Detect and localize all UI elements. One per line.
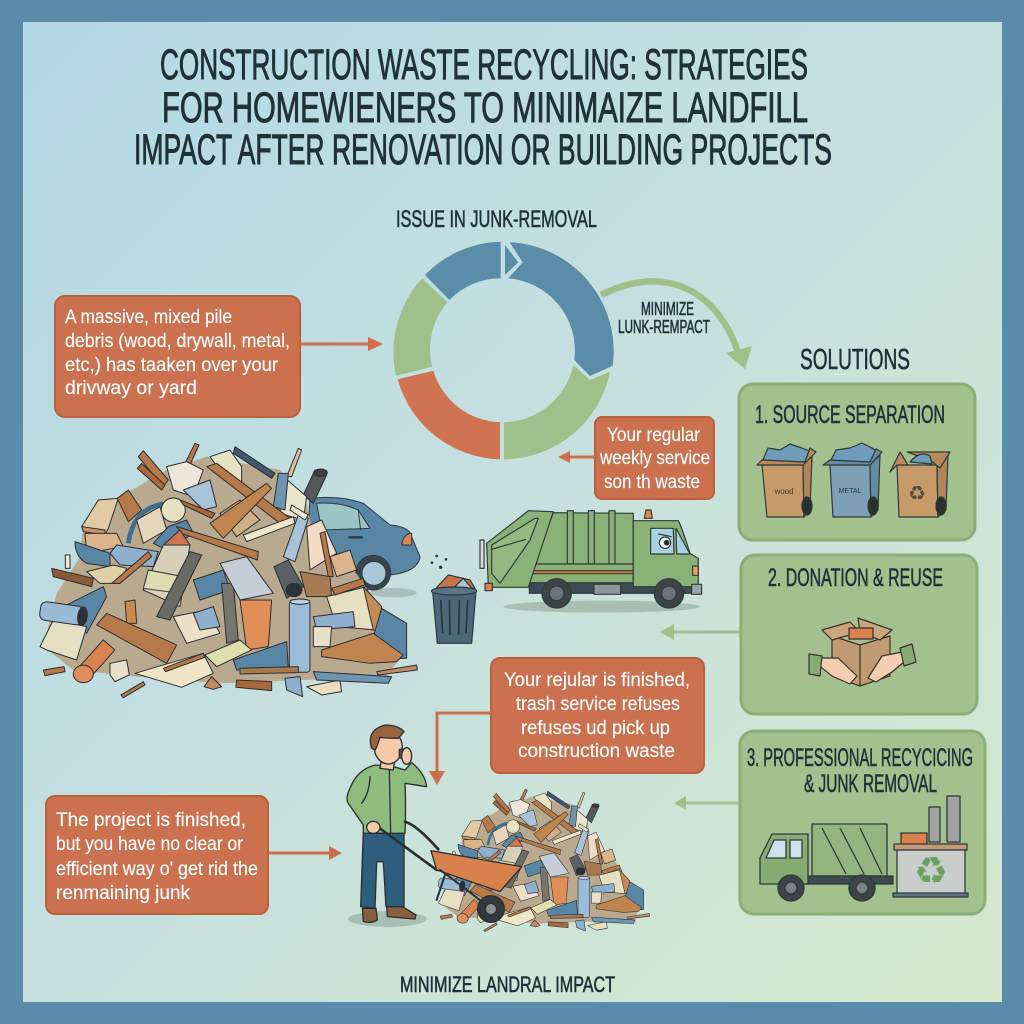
callout: weekly service: Your regular	[607, 425, 701, 446]
footer label: MINIMIZE LANDRAL IMPACT	[400, 972, 615, 997]
callout: weekly service	[595, 417, 714, 499]
callout: massive pile	[55, 296, 300, 417]
icon: recycling truck	[760, 824, 893, 901]
icon: trash can	[431, 555, 477, 643]
callout: massive pile: debris (wood, drywall, metal,	[65, 331, 290, 352]
panel: donation and reuse	[741, 555, 977, 714]
callout: massive pile: drivway or yard	[65, 378, 197, 399]
icon: recycling plant	[893, 796, 968, 897]
callout: massive pile: A massive, mixed pile	[65, 307, 232, 328]
callout: refuses pickup: refuses ud pick up	[521, 718, 670, 739]
illustration: car behind pile	[307, 497, 420, 597]
callout: project finished: renmaining junk	[56, 883, 190, 904]
arrow label: LUNK-REMPACT	[618, 317, 710, 337]
donut heading: ISSUE IN JUNK-REMOVAL	[396, 206, 597, 233]
icon: wood bin: wood	[773, 487, 794, 496]
arrow: project finished to person	[268, 846, 342, 860]
callout: weekly service: son th waste	[604, 472, 700, 493]
panel: professional recycling: & JUNK REMOVAL	[804, 770, 937, 798]
solutions heading: SOLUTIONS	[800, 344, 910, 376]
illustration: garbage truck	[480, 510, 702, 613]
icon: recycling bin: ♻	[908, 481, 926, 505]
callout: project finished: but you have no clear or	[56, 834, 244, 855]
arrow: weekly service to donut	[558, 451, 595, 463]
callout: refuses pickup: trash service refuses	[516, 694, 680, 715]
arrow label	[618, 299, 710, 337]
illustration: small debris pile	[438, 789, 650, 932]
panel: source separation bins	[823, 443, 950, 517]
illustration: person with wheelbarrow	[347, 725, 522, 927]
donut chart	[393, 242, 614, 459]
icon: wood bin	[757, 444, 816, 517]
arrow label: MINIMIZE	[641, 299, 694, 319]
callout: project finished: efficient way o' get rid the	[56, 859, 258, 880]
arrow: donut to solutions	[601, 281, 752, 369]
panel: source separation	[739, 384, 975, 540]
title	[134, 41, 832, 174]
callout: refuses pickup: Your rejular is finished,	[504, 670, 690, 691]
arrow: refuses pickup to person	[429, 713, 491, 785]
illustration: large debris pile	[39, 443, 417, 698]
callout: refuses pickup	[491, 658, 704, 773]
callout: project finished	[46, 796, 268, 914]
callout: weekly service: weekly service	[599, 448, 710, 469]
icon: box held by hands	[809, 618, 916, 686]
callout: project finished: The project is finished,	[56, 810, 246, 831]
panel: professional recycling	[740, 731, 985, 914]
green arrow: donation to truck	[660, 624, 741, 640]
callout: refuses pickup: construction waste	[518, 741, 675, 762]
arrow: callout to donut	[300, 337, 383, 351]
green arrow: professional to person	[674, 796, 741, 810]
callout: massive pile: etc,) has taaken over your	[65, 355, 279, 376]
icon: metal bin: METAL	[839, 488, 862, 495]
icon: recycling plant: ♻	[914, 849, 948, 893]
